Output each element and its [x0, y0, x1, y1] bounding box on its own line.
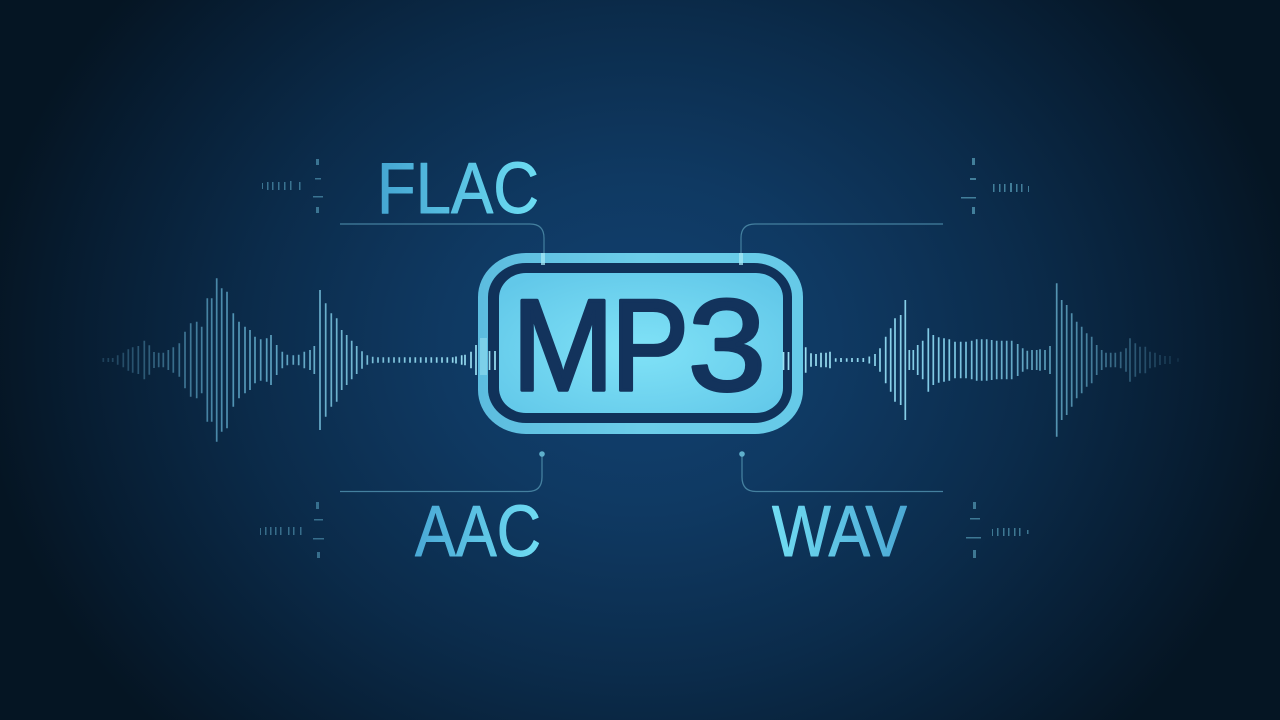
ring highlights [480, 253, 743, 375]
MP3 title: 3 [688, 272, 766, 418]
badge outer ring [478, 253, 803, 434]
label: FLAC: FLAC [377, 149, 539, 229]
connector: FLAC to MP3 [340, 224, 544, 262]
MP3 title: M [512, 272, 614, 418]
connector: top right [741, 224, 943, 262]
connector: AAC to MP3 [340, 451, 545, 492]
right waveform [806, 283, 1178, 437]
connector: WAV to MP3 [739, 451, 943, 492]
badge dark gap [488, 263, 792, 423]
tick cluster: top right [961, 158, 1029, 214]
MP3 title [512, 272, 766, 418]
ring waveform bars [490, 351, 788, 370]
tick cluster: top left [262, 159, 323, 213]
badge inner panel [499, 273, 783, 413]
tick cluster: bottom right [966, 502, 1028, 558]
label: AAC: AAC [415, 492, 541, 572]
tick cluster: bottom left [260, 502, 324, 558]
MP3 title: P [611, 272, 689, 418]
MP3 badge [478, 253, 803, 434]
label: WAV: WAV [772, 492, 907, 572]
left waveform [103, 278, 476, 442]
